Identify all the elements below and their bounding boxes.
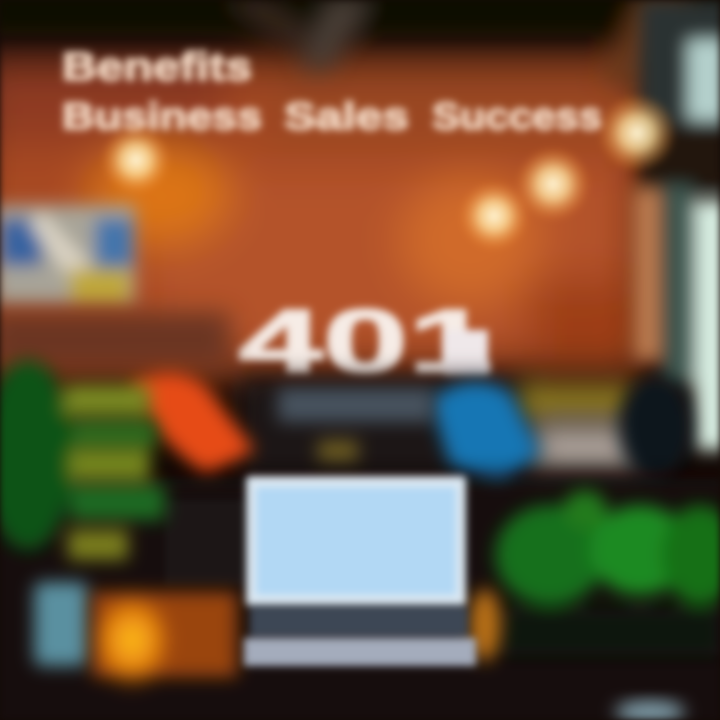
centre detail [278, 388, 433, 462]
large number on wall: 401 [238, 292, 493, 392]
person: orange shirt [130, 372, 255, 478]
background: orange brick wall [0, 55, 650, 375]
plant: right foliage [495, 490, 720, 655]
laptop keyboard [244, 606, 476, 666]
wall picture [0, 205, 135, 305]
heading: Benefits [62, 45, 252, 89]
person: blue shirt [430, 382, 540, 488]
large number on wall [238, 292, 493, 392]
window: right side light [634, 0, 720, 450]
heading: Business [62, 96, 262, 138]
pendant lights [100, 93, 677, 252]
pot: teal planter [34, 582, 88, 666]
laptop screen [246, 476, 466, 606]
plant: left foliage [0, 360, 165, 560]
person: dark figure right [619, 376, 691, 480]
orange glowing lamp [88, 588, 501, 692]
heading: Success [432, 96, 602, 138]
ceiling: dark beams [0, 0, 720, 90]
heading: Sales [284, 96, 409, 138]
lower background [0, 478, 720, 720]
bottom right light spot [615, 700, 685, 720]
heading [62, 45, 602, 138]
laptop [244, 476, 476, 666]
people: table band [0, 312, 650, 478]
